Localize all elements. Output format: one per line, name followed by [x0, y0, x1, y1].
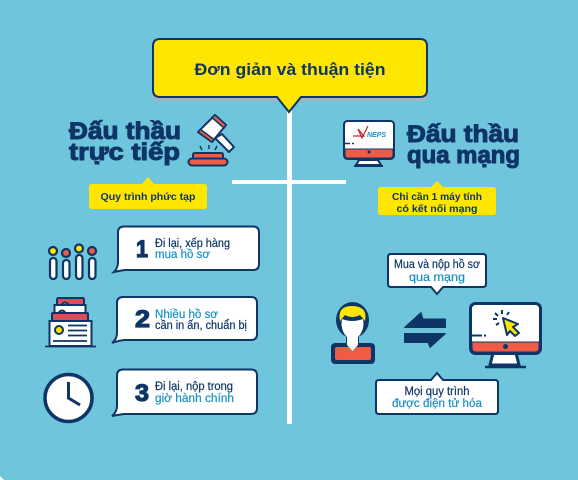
- heading: đấu thầu qua mạng: [407, 121, 520, 169]
- bubble 3: Đi lại, nộp trong: [155, 381, 233, 393]
- bubble 3: [112, 370, 257, 416]
- icon: NEPS monitor: [344, 121, 394, 166]
- icon: NEPS monitor: NEPS: [367, 132, 386, 139]
- bubble 2: 2: [135, 306, 150, 333]
- bubble 2: cần in ấn, chuẩn bị: [155, 320, 247, 332]
- bubble: mua và nộp hồ sơ: [388, 254, 486, 294]
- bubble 1: 1: [136, 236, 148, 263]
- tag: quy trình phức tạp: Quy trình phức tạp: [100, 191, 196, 203]
- divider cross: [232, 108, 346, 424]
- bubble: mua và nộp hồ sơ: Mua và nộp hồ sơ: [394, 259, 480, 271]
- icon: documents stack: [45, 298, 96, 346]
- icon: people queue: [49, 244, 96, 279]
- bubble 1: [114, 226, 259, 272]
- heading: đấu thầu qua mạng: qua mạng: [407, 142, 520, 169]
- tag: quy trình phức tạp: [89, 177, 207, 209]
- title callout: [152, 39, 428, 112]
- icon: exchange arrows: [404, 312, 446, 348]
- bubble 2: Nhiều hồ sơ: [155, 309, 218, 321]
- heading: đấu thầu qua mạng: Đấu thầu: [407, 121, 519, 148]
- tag: chỉ cần 1 máy tính: có kết nối mạng: [396, 203, 478, 215]
- heading: đấu thầu trực tiếp: [69, 118, 181, 166]
- heading: đấu thầu trực tiếp: Đấu thầu: [69, 118, 181, 145]
- bubble 3: 3: [135, 380, 149, 407]
- bubble: mọi quy trình: [376, 373, 498, 414]
- tag: chỉ cần 1 máy tính: Chỉ cần 1 máy tính: [392, 191, 482, 203]
- bubble: mọi quy trình: được điện tử hóa: [392, 398, 483, 410]
- bubble 2: [112, 297, 257, 343]
- bubble 3: giờ hành chính: [155, 393, 234, 405]
- icon: gavel: [188, 115, 234, 166]
- bubble: mua và nộp hồ sơ: qua mạng: [409, 272, 465, 284]
- title callout: Đơn giản và thuận tiện: [194, 60, 386, 79]
- bubble: mọi quy trình: Mọi quy trình: [404, 386, 470, 398]
- bubble 1: mua hồ sơ: [155, 249, 210, 261]
- bubble 1: Đi lại, xếp hàng: [155, 238, 230, 250]
- heading: đấu thầu trực tiếp: trực tiếp: [69, 139, 180, 166]
- icon: clock: [45, 374, 92, 422]
- icon: user: [331, 302, 375, 364]
- icon: computer with cursor: [470, 304, 540, 367]
- tag: chỉ cần 1 máy tính: [378, 181, 496, 215]
